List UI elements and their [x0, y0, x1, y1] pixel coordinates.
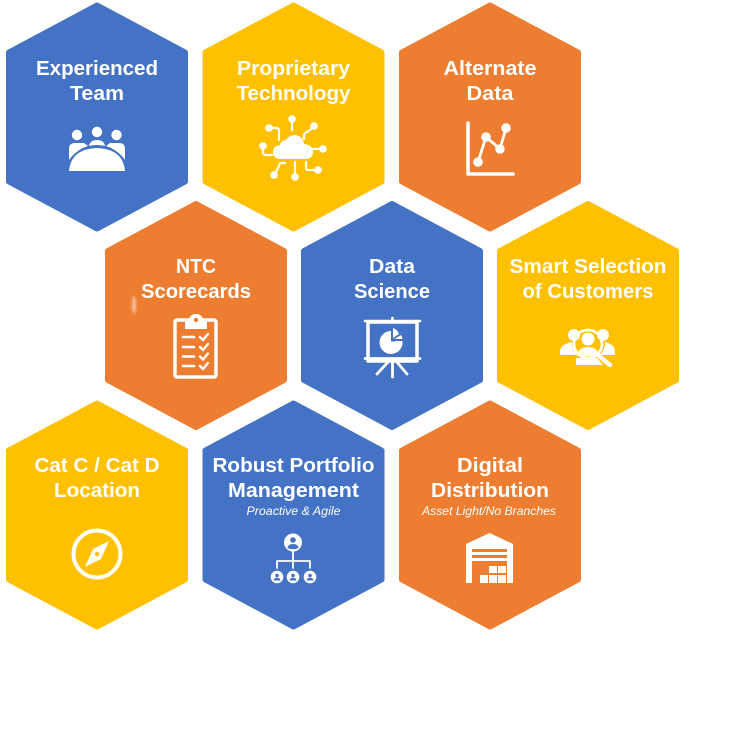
heading: Experienced Team: [36, 57, 158, 105]
heading: Robust Portfolio Management: Robust Portfolio: [212, 454, 374, 477]
panel: Robust Portfolio Management: [206, 404, 382, 626]
heading: Robust Portfolio Management: Management: [228, 479, 359, 502]
heading: Cat C / Cat D Location: Location: [54, 479, 140, 502]
icon: org chart: [271, 534, 316, 583]
icon: presentation board: [365, 318, 420, 377]
icon: team around table: [69, 127, 125, 171]
icon: compass: [74, 530, 120, 578]
panel: Alternate Data: [402, 6, 578, 228]
heading: Robust Portfolio Management: [212, 454, 374, 502]
heading: NTC Scorecards: [141, 255, 251, 303]
panel: Data Science: [304, 204, 480, 427]
heading: Digital Distribution: [431, 454, 549, 502]
panel: NTC Scorecards: [108, 204, 284, 427]
heading: Cat C / Cat D Location: [34, 454, 160, 502]
heading: Alternate Data: [444, 57, 536, 105]
heading: Digital Distribution: Digital: [457, 454, 523, 477]
heading: Digital Distribution: Distribution: [431, 479, 549, 502]
heading: Experienced Team: Team: [70, 82, 124, 105]
panel: Smart Selection of Customers: [500, 204, 676, 427]
heading: Data Science: Science: [354, 280, 430, 303]
panel: Proprietary Technology: [206, 6, 382, 228]
icon: customer search: [560, 329, 615, 365]
heading: Data Science: Data: [369, 255, 416, 278]
heading: Alternate Data: Alternate: [444, 57, 536, 80]
heading: Proprietary Technology: Technology: [236, 82, 351, 105]
icon: checklist clipboard: [175, 314, 216, 377]
subheading: Asset Light/No Branches: Asset Light/No Branches: [421, 504, 556, 518]
heading: Smart Selection of Customers: [510, 255, 666, 303]
icon: warehouse: [466, 533, 513, 583]
heading: Smart Selection of Customers: Smart Selection: [510, 255, 666, 278]
icon: line chart: [468, 123, 513, 174]
heading: Proprietary Technology: Proprietary: [237, 57, 351, 80]
subheading: Proactive & Agile: Proactive & Agile: [246, 504, 341, 518]
icon: cloud network: [259, 115, 327, 181]
heading: Experienced Team: Experienced: [36, 57, 158, 80]
panel: Experienced Team: [9, 6, 185, 228]
heading: NTC Scorecards: NTC: [176, 255, 216, 278]
heading: Cat C / Cat D Location: Cat C / Cat D: [34, 454, 160, 477]
heading: Smart Selection of Customers: of Customers: [522, 280, 654, 303]
panel: Digital Distribution: [402, 404, 578, 626]
heading: Proprietary Technology: [236, 57, 351, 105]
heading: NTC Scorecards: Scorecards: [141, 280, 251, 303]
heading: Data Science: [354, 255, 430, 303]
heading: Alternate Data: Data: [466, 82, 514, 105]
panel: Cat C / Cat D Location: [9, 404, 185, 626]
